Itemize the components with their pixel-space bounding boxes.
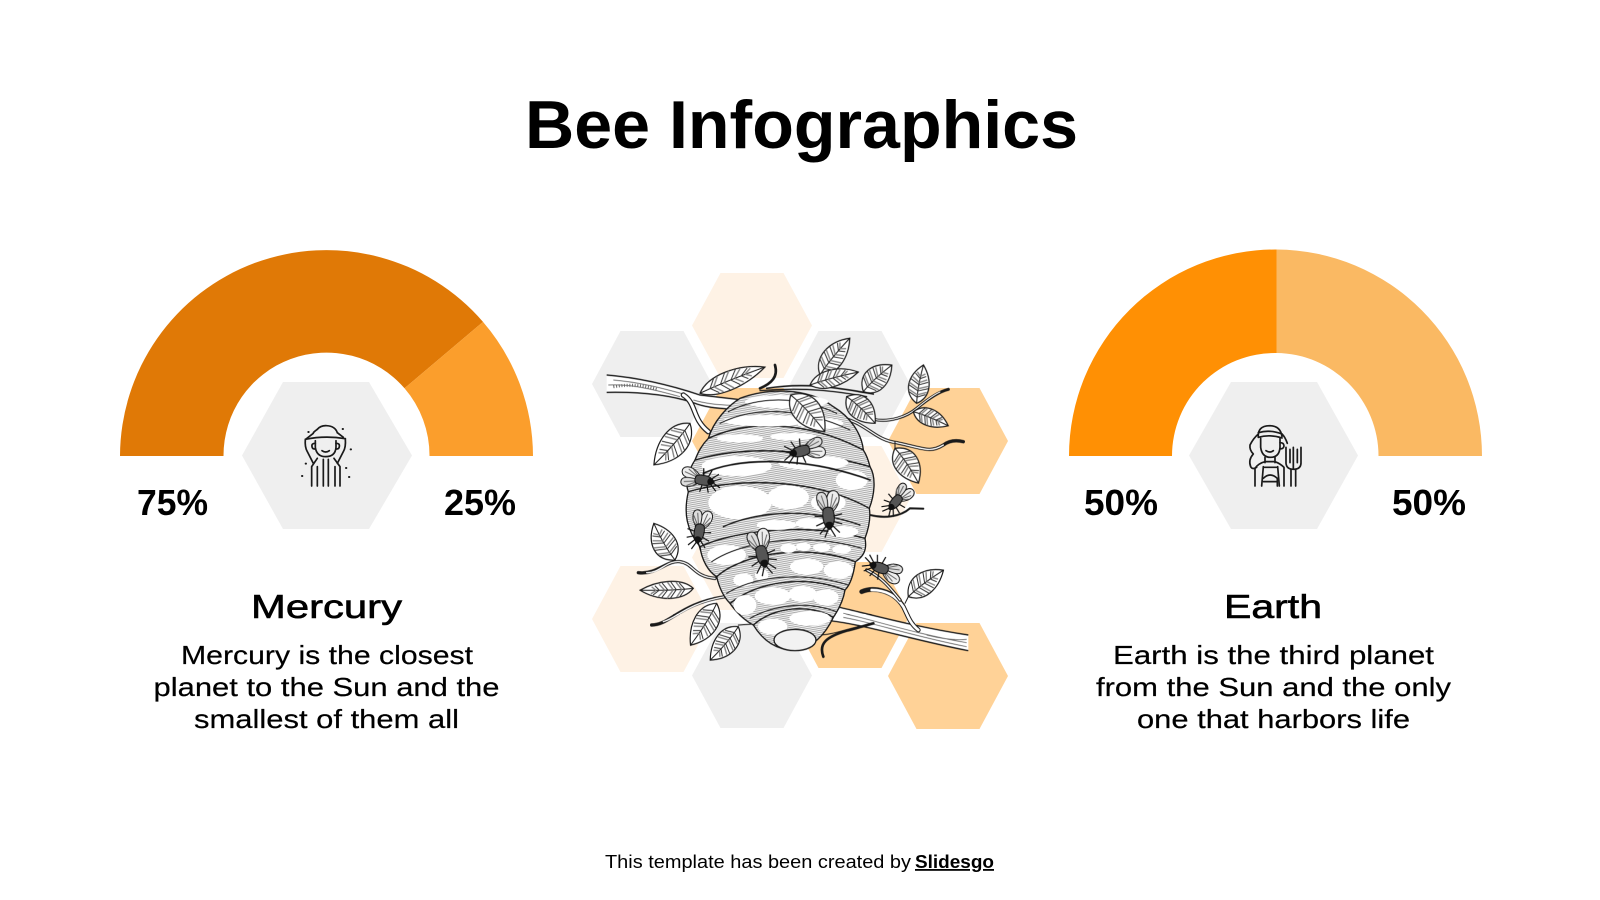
chart segment: left 50% (1069, 249, 1276, 456)
heading: Earth: Earth (1224, 588, 1322, 625)
illustration: beehive on a branch (607, 331, 968, 668)
text block: Mercury description (154, 640, 500, 734)
chart segment: right 50% (1276, 250, 1482, 456)
text block: Mercury description: planet to the Sun and the (154, 672, 500, 702)
illustration: honeycomb hexagons (592, 273, 1008, 729)
vines (638, 365, 963, 657)
value: left 50%: 50% (1084, 482, 1158, 523)
heading: Mercury: Mercury (251, 588, 403, 625)
footer credit: Slidesgo (915, 852, 994, 872)
text block: Mercury description: smallest of them all (194, 704, 459, 734)
branch: lower right (830, 607, 968, 651)
icon: beekeeper with hat (302, 426, 351, 486)
icon: farmer with fork (1250, 426, 1301, 486)
bees (679, 433, 917, 587)
chart segment: 25% (404, 322, 533, 456)
value: 75%: 75% (137, 482, 208, 523)
text block: Mercury description: Mercury is the closest (181, 640, 474, 670)
text block: Earth description: Earth is the third planet (1113, 640, 1435, 670)
text block: Earth description: one that harbors life (1137, 704, 1410, 734)
hive tiers (686, 391, 874, 650)
comb cells (702, 395, 868, 635)
branch: upper left (607, 375, 743, 409)
panel: Mercury (120, 250, 533, 734)
hive cap (774, 629, 816, 651)
half-donut chart: Mercury 75/25 (120, 250, 533, 456)
hexagon icon background (242, 382, 412, 529)
hive body (686, 391, 874, 650)
value: 25%: 25% (444, 482, 516, 523)
hive bands (703, 400, 870, 618)
text block: Earth description: from the Sun and the only (1096, 672, 1451, 702)
title: Bee Infographics (525, 87, 1078, 163)
leaves (640, 331, 952, 668)
hexagon icon background (1189, 382, 1358, 529)
chart segment: 75% (120, 250, 483, 456)
half-donut chart: Earth 50/50 (1069, 249, 1482, 456)
value: right 50%: 50% (1392, 482, 1466, 523)
footer credit: This template has been created by (605, 852, 911, 872)
panel: Earth (1069, 249, 1482, 734)
text block: Earth description (1096, 640, 1451, 734)
